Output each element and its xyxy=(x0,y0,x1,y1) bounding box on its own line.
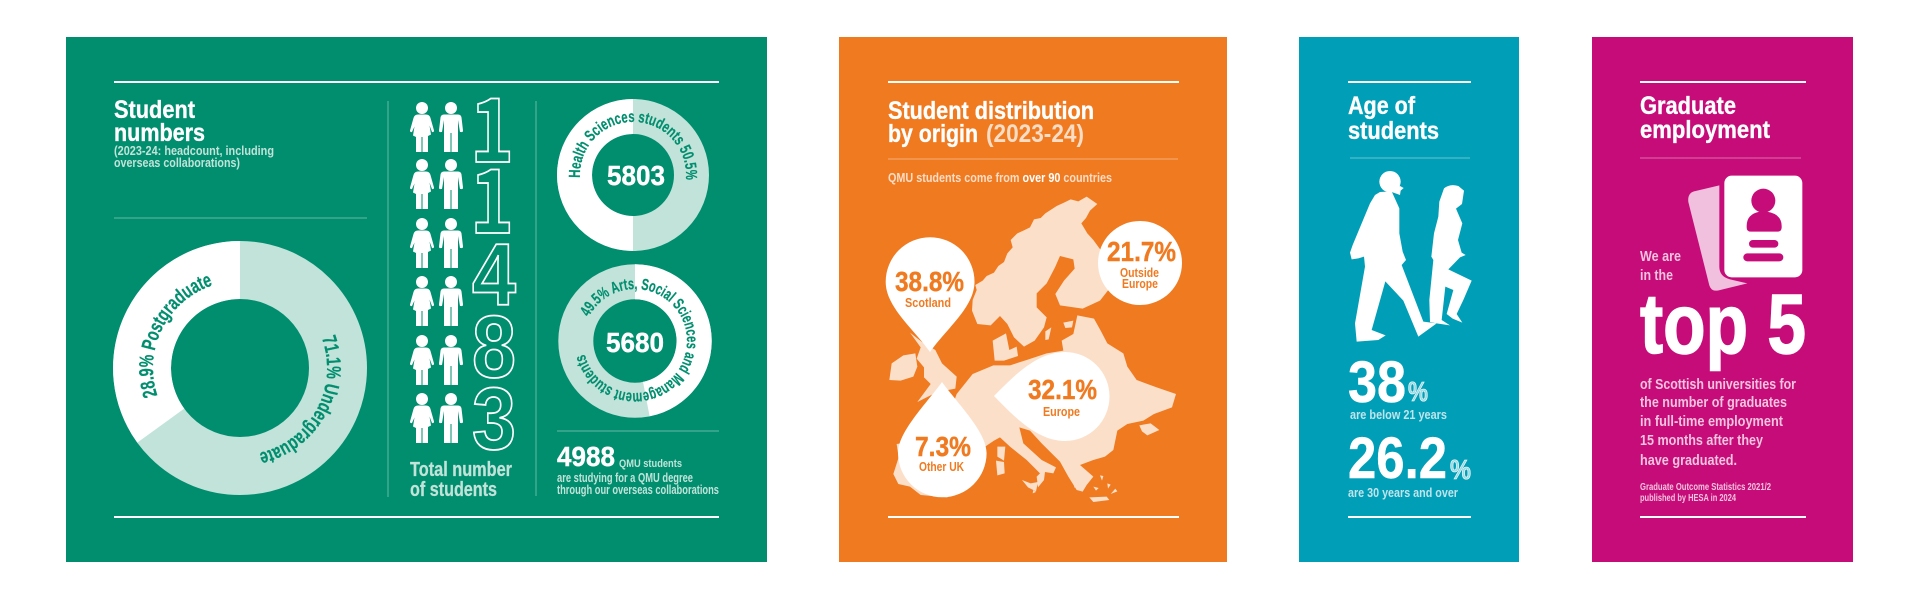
text block: employment description: of Scottish universities for xyxy=(1640,376,1796,393)
heading: graduate employment xyxy=(1640,92,1771,144)
callout: Scotland 38.8%: Scotland xyxy=(905,295,951,310)
callout: Europe 32.1% xyxy=(994,352,1110,441)
panel: student distribution by origin xyxy=(839,37,1227,562)
source note xyxy=(1640,481,1771,504)
outlined number: 11483: 1 xyxy=(470,61,514,188)
donut chart: arts, social sciences and management: 49.5% Arts, Social Sciences and Management students xyxy=(577,278,696,402)
subheading: headcount note xyxy=(114,143,274,170)
map: Europe xyxy=(889,197,1176,502)
label: total number of students: of students xyxy=(410,479,497,501)
stat: 38% below 21 years: 38 xyxy=(1348,350,1406,415)
heading: student numbers xyxy=(114,96,205,147)
callout: outside Europe 21.7%: Europe xyxy=(1122,276,1158,291)
donut chart: health sciences: Health Sciences students 50.5% xyxy=(568,113,698,180)
heading: graduate employment: Graduate xyxy=(1640,92,1736,120)
text: we are in the xyxy=(1640,248,1681,284)
outlined number: 11483: 3 xyxy=(472,369,516,468)
text: we are in the: We are xyxy=(1640,248,1681,265)
text block: employment description: have graduated. xyxy=(1640,452,1737,469)
heading: student distribution: (2023-24) xyxy=(986,120,1084,148)
stat: 26.2% 30 years and over: % xyxy=(1450,454,1471,485)
stat: 26.2% 30 years and over: 26.2 xyxy=(1348,426,1447,491)
heading: graduate employment: employment xyxy=(1640,116,1771,144)
donut chart: health sciences xyxy=(557,99,709,251)
callout: outside Europe 21.7%: 21.7% xyxy=(1107,236,1176,267)
panel: student numbers xyxy=(66,37,767,562)
outlined number: 11483: 4 xyxy=(472,225,516,324)
subheading: headcount note: (2023-24: headcount, including xyxy=(114,143,274,158)
source note: published by HESA in 2024 xyxy=(1640,492,1736,504)
text block: overseas collaborations: are studying for a QMU degree xyxy=(557,470,693,485)
text block: overseas collaborations: 4988 xyxy=(557,441,615,472)
subheading: headcount note: overseas collaborations) xyxy=(114,155,240,170)
pictogram: rows of students xyxy=(410,102,463,443)
text block: employment description: the number of graduates xyxy=(1640,394,1787,411)
callout: outside Europe 21.7% xyxy=(1098,221,1182,305)
heading: age of students: students xyxy=(1348,117,1439,145)
outlined number: 11483: 8 xyxy=(472,297,516,396)
heading: student distribution: by origin xyxy=(888,120,978,148)
callout: Europe 32.1%: 32.1% xyxy=(1028,374,1097,405)
label: total number of students: Total number xyxy=(410,459,512,481)
donut chart: arts, social sciences and management: 5680 xyxy=(606,327,664,358)
callout: other UK 7.3% xyxy=(898,382,987,497)
donut chart: health sciences: 5803 xyxy=(607,160,665,191)
heading: student distribution xyxy=(888,97,1094,148)
label: total number of students xyxy=(410,459,512,501)
text block: overseas collaborations: through our overseas collaborations xyxy=(557,482,719,497)
stat: 26.2% 30 years and over: are 30 years and over xyxy=(1348,485,1458,500)
callout: Europe 32.1%: Europe xyxy=(1043,404,1080,419)
callout: other UK 7.3%: Other UK xyxy=(919,459,964,474)
text: we are in the: in the xyxy=(1640,267,1673,284)
heading: age of students: Age of xyxy=(1348,92,1416,120)
heading: student numbers: Student xyxy=(114,96,196,124)
callout: Scotland 38.8%: 38.8% xyxy=(895,266,964,297)
heading: age of students xyxy=(1348,92,1439,145)
text block: overseas collaborations: QMU students xyxy=(619,458,682,470)
stat: 38% below 21 years: % xyxy=(1408,376,1428,407)
icon: walking man and woman xyxy=(1350,171,1472,342)
panel: age of students xyxy=(1299,37,1519,562)
heading: student numbers: numbers xyxy=(114,119,205,147)
text block: employment description: in full-time employment xyxy=(1640,413,1783,430)
callout: other UK 7.3%: 7.3% xyxy=(915,431,971,462)
heading: student distribution: Student distribution xyxy=(888,97,1094,125)
outlined number: 11483 xyxy=(470,61,516,468)
donut chart: undergraduate and postgraduate: 71.1% Undergraduate xyxy=(260,334,342,463)
donut chart: undergraduate and postgraduate: 28.9% Postgraduate xyxy=(139,276,212,398)
text block: overseas collaborations xyxy=(557,441,719,497)
text: over 90 countries: QMU students come from over 90 countries xyxy=(888,170,1112,185)
donut chart: undergraduate and postgraduate xyxy=(113,241,367,495)
outlined number: 11483: 1 xyxy=(470,132,514,259)
text block: employment description: 15 months after they xyxy=(1640,432,1764,449)
text block: employment description xyxy=(1640,376,1796,469)
stat: 38% below 21 years xyxy=(1348,350,1447,422)
big text: top 5: top 5 xyxy=(1640,277,1806,371)
panel: graduate employment xyxy=(1592,37,1853,562)
callout: Scotland 38.8% xyxy=(886,237,974,352)
stat: 38% below 21 years: are below 21 years xyxy=(1350,407,1447,422)
source note: Graduate Outcome Statistics 2021/2 xyxy=(1640,481,1771,493)
icon: ID cards xyxy=(1688,176,1802,291)
callout: outside Europe 21.7%: Outside xyxy=(1120,265,1159,280)
